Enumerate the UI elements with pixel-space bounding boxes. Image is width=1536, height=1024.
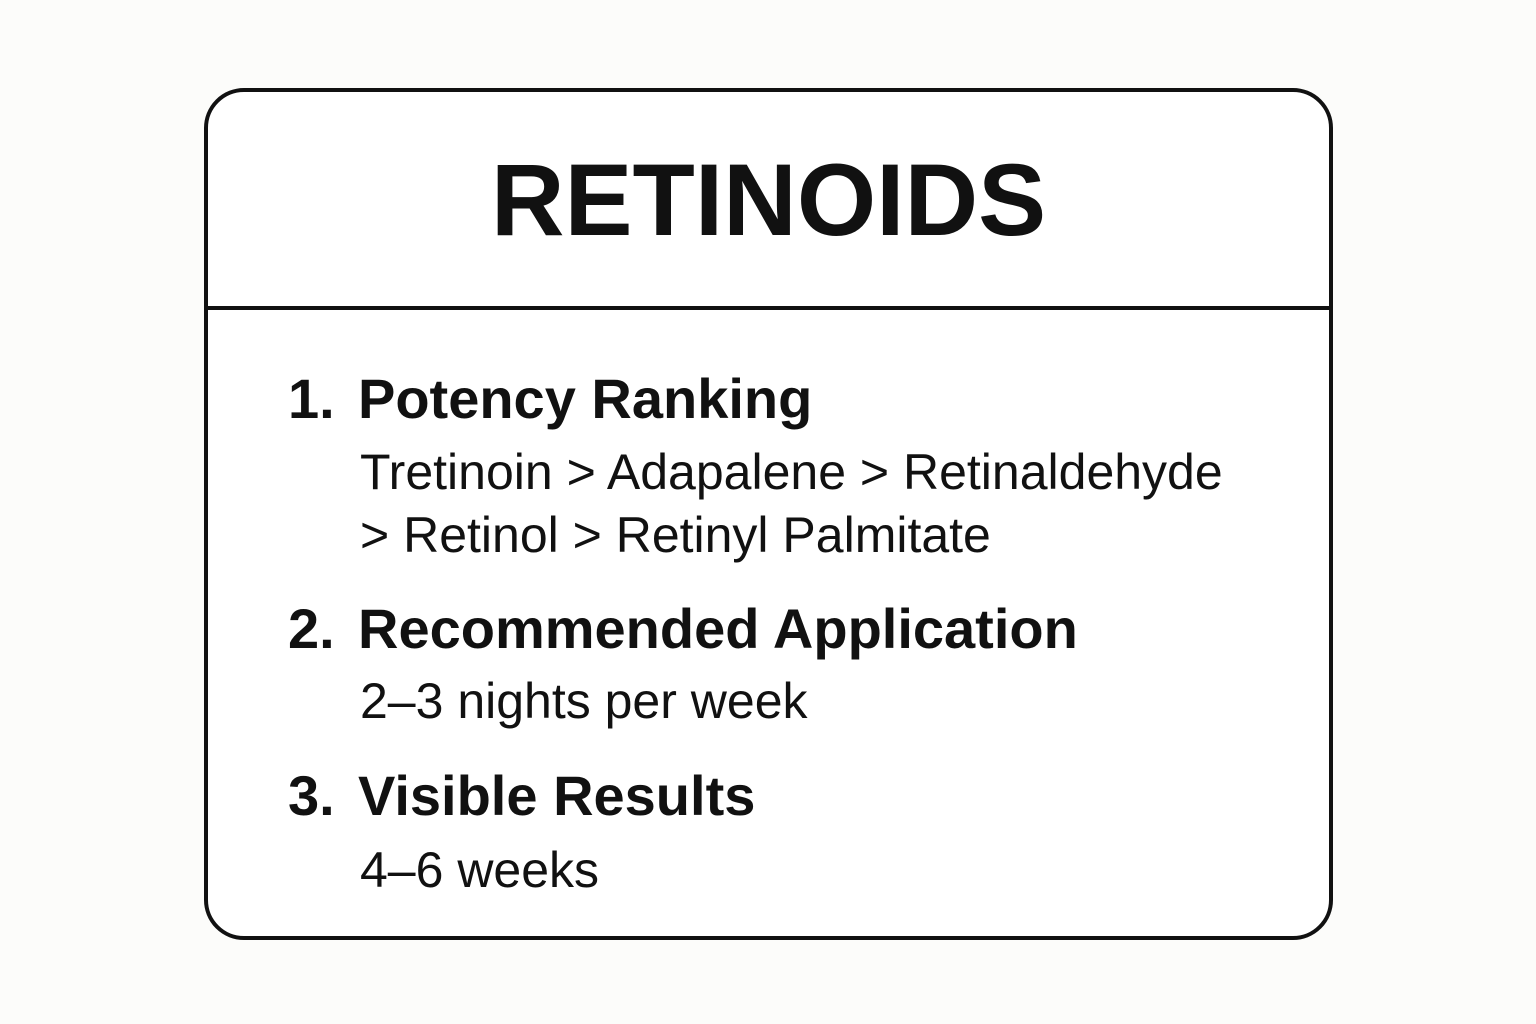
body 2: 2–3 nights per week <box>360 673 808 729</box>
heading 2: Recommended Application <box>358 597 1078 660</box>
heading 1: 1. <box>288 367 335 430</box>
item 1: potency ranking <box>288 367 1223 563</box>
item 3: visible results <box>288 764 755 898</box>
title: RETINOIDS <box>491 143 1046 257</box>
body 1 <box>360 444 1223 563</box>
heading 3: 3. <box>288 764 335 827</box>
heading 2: 2. <box>288 597 335 660</box>
item 2: recommended application <box>288 597 1078 729</box>
body 1: > Retinol > Retinyl Palmitate <box>360 507 991 563</box>
heading 1: Potency Ranking <box>358 367 812 430</box>
heading 3: Visible Results <box>358 764 755 827</box>
body 3: 4–6 weeks <box>360 842 599 898</box>
body 1: Tretinoin > Adapalene > Retinaldehyde <box>360 444 1223 500</box>
panel: retinoids card <box>204 88 1333 940</box>
